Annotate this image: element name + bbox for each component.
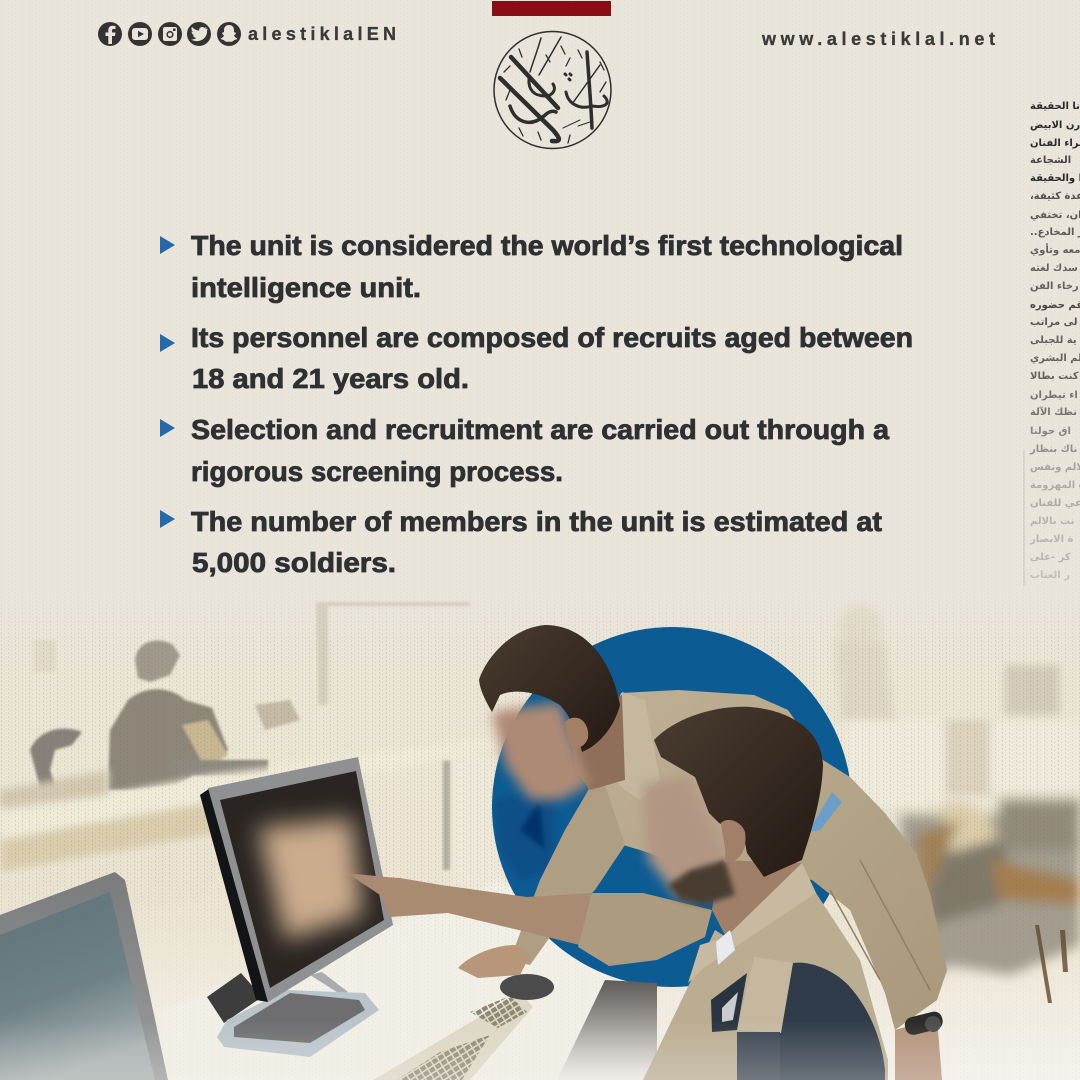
newspaper column: Arabic text fading downward [1029,101,1080,581]
newspaper column: Arabic text fading downward: رن الابيض [1030,120,1080,131]
bullet 1: intelligence unit. [191,272,421,303]
left background: seated worker [30,641,300,795]
man behind: hand on desk [458,945,530,978]
newspaper column: Arabic text fading downward: ناك بنظار [1029,444,1077,455]
left monitor [0,872,168,1080]
bullet 2 [160,322,913,394]
keyboard [373,993,533,1080]
man behind: face blurred [492,702,590,800]
man in front: dark shoulder patch [778,963,885,1080]
man in front: beard [668,860,735,905]
icon: youtube [128,22,152,46]
newspaper column: Arabic text fading downward: ية للجبلى [1030,335,1077,346]
darker shapes in blue circle [496,798,554,878]
bullet 1: The unit is considered the world’s first technological [191,230,903,261]
bullet 3 [160,414,890,487]
icon: twitter [187,22,211,46]
newspaper column: Arabic text fading downward: نظك الآلة [1030,406,1077,418]
newspaper column rule [1024,450,1025,586]
newspaper column: Arabic text fading downward: سدك لغته [1030,263,1078,274]
bullet 1 [160,230,903,303]
bullet list [160,230,913,578]
bullet 3: rigorous screening process. [191,456,563,487]
newspaper column: Arabic text fading downward: اق حولنا [1030,426,1071,437]
faded office background photo [0,575,1080,1080]
mouse pad [500,974,554,1000]
newspaper column: Arabic text fading downward: كر -على [1030,552,1071,563]
icon: instagram [158,22,182,46]
bullet 4: 5,000 soldiers. [192,547,396,578]
man in front: torso [643,863,888,1080]
left background: window frame [34,602,502,885]
man in front: face blurred [642,775,725,900]
newspaper column: Arabic text fading downward: ر العتاب [1030,570,1070,581]
grey desk shadow below circle [557,980,657,1080]
blue circle [492,627,852,987]
handle text: alestiklalEN [248,24,396,44]
left background: desk partition [0,738,500,940]
man behind: ear [565,718,588,748]
logo: calligraphic roundel [494,32,611,148]
central monitor [200,757,393,1002]
newspaper column: Arabic text fading downward: رخاء الفن [1030,281,1079,292]
foreground photo: desk monitors [0,757,554,1080]
newspaper column: Arabic text fading downward: كنت بطالا [1030,371,1079,382]
header: website: www.alestiklal.net [761,29,995,49]
newspaper column: Arabic text fading downward: معه وتأوي [1030,243,1080,256]
icon: facebook [98,22,122,46]
newspaper column: Arabic text fading downward: اء تيطران [1030,390,1078,401]
bullet 4 [160,506,882,578]
bullet 3: Selection and recruitment are carried out through a [191,414,890,445]
bullet 2: Its personnel are composed of recruits aged between [191,322,913,353]
header: top red bar [492,1,611,16]
darker dotted texture over lower photo [1,617,1080,918]
newspaper column: Arabic text fading downward: نا الحقيقة [1030,101,1080,112]
men in uniform [347,625,947,1080]
icon: snapchat [217,22,241,46]
header: social media handle [98,22,396,46]
man in front: neck [712,860,802,937]
man in front: ear [721,820,746,862]
man behind: hair [479,625,620,752]
desk surface [160,880,640,1080]
man in front: pointing arm [347,873,712,966]
man behind: wrist and watch [895,1010,944,1080]
newspaper column: Arabic text fading downward: الشجاعة [1030,155,1071,166]
man in front: hair [654,707,823,877]
bottom white fade [0,1020,1080,1080]
man behind: body and sleeve [510,690,947,1030]
blurred screen [258,818,362,940]
right background: faded figures and dark desks [835,605,1080,805]
monitor stand and base [207,972,379,1057]
newspaper column: Arabic text fading downward: نت بالالم [1030,516,1074,527]
bullet 2: 18 and 21 years old. [192,363,469,394]
man in front: epaulette [711,957,793,1080]
newspaper column: Arabic text fading downward: ة الابصار [1029,534,1073,545]
bullet 4: The number of members in the unit is estimated at [191,506,882,537]
right background: table legs [1035,925,1068,1003]
newspaper column: Arabic text fading downward: لى مراتب [1030,317,1078,328]
man behind: neck [570,695,625,790]
